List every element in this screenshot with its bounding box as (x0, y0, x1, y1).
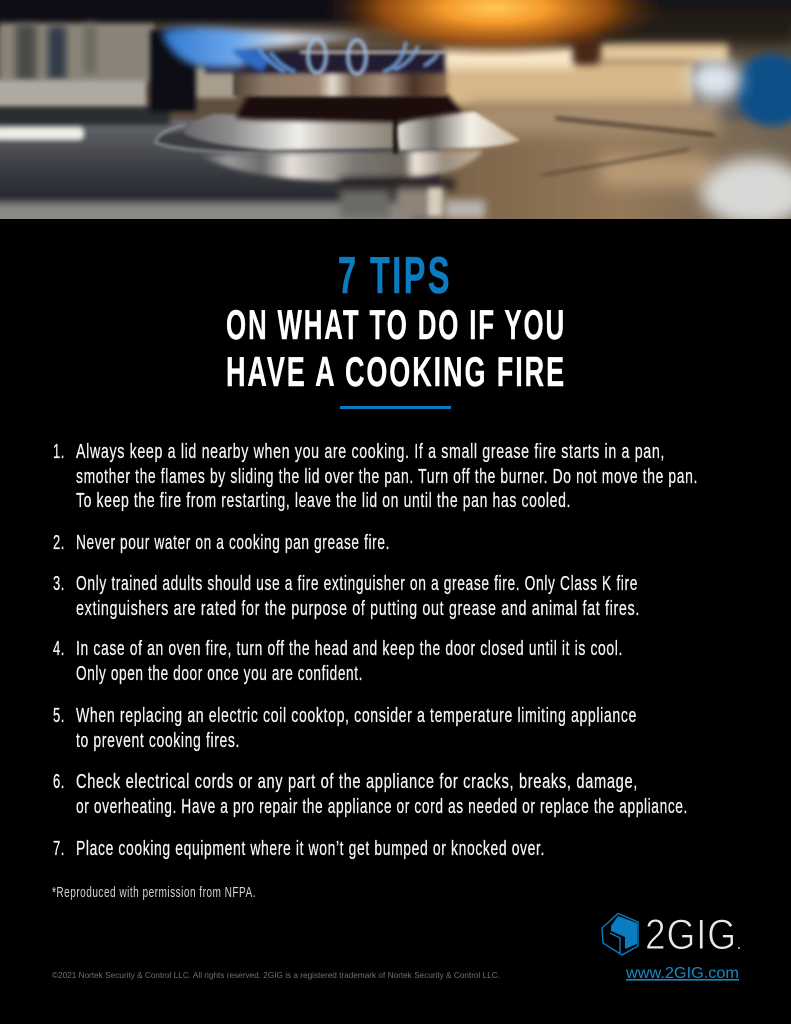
left highlights (0, 127, 84, 140)
warm background (445, 62, 695, 106)
logo: 2GIG (602, 911, 740, 959)
title underline (340, 406, 451, 409)
photo: gas burner with blue flame (0, 0, 791, 229)
tip 6: 6. (53, 771, 65, 793)
tip 2: Never pour water on a cooking pan grease fire. (76, 532, 390, 554)
tip 1: To keep the fire from restarting, leave the lid on until the pan has cooled. (76, 490, 571, 512)
heading line: have a cooking fire: HAVE A COOKING FIRE (226, 348, 566, 395)
blue kettle at right edge (736, 54, 791, 126)
tip 2 (53, 532, 390, 554)
tip 4 (53, 638, 623, 685)
tip 2: 2. (53, 532, 65, 554)
background upper band (0, 0, 791, 24)
tip 7 (53, 838, 545, 860)
heading line: on what to do if you: ON WHAT TO DO IF YOU (226, 301, 566, 348)
logo wordmark: 2GIG (645, 911, 737, 959)
stove surface (0, 14, 791, 122)
burner body (235, 95, 462, 122)
tip 3 (53, 573, 640, 620)
reflection beneath base (200, 150, 483, 181)
tip 5 (53, 705, 637, 752)
logo trademark dot (738, 947, 740, 949)
tip 7: Place cooking equipment where it won’t get bumped or knocked over. (76, 838, 545, 860)
burner base domes (183, 114, 393, 150)
tip 5: to prevent cooking fires. (76, 730, 240, 752)
tip 4: Only open the door once you are confident. (76, 663, 363, 685)
footnote: *Reproduced with permission from NFPA. (52, 884, 256, 901)
tip 7: 7. (53, 838, 65, 860)
blue flame (162, 27, 370, 68)
title (226, 247, 566, 395)
copyright notice: ©2021 Nortek Security & Control LLC. All rights reserved. 2GIG is a registered trademark of Nortek Security & Control LLC. (52, 970, 500, 980)
website link: www.2GIG.com (625, 965, 739, 982)
tip 4: 4. (53, 638, 65, 660)
tip 1: 1. (53, 441, 65, 463)
burner outer rim (156, 130, 392, 152)
tip 1 (53, 441, 698, 512)
heading: 7 TIPS: 7 TIPS (338, 247, 452, 305)
icon: blue cube (602, 914, 638, 955)
tips list (53, 441, 698, 860)
tip 6 (53, 771, 688, 818)
tip 5: 5. (53, 705, 65, 727)
tip 3: 3. (53, 573, 65, 595)
